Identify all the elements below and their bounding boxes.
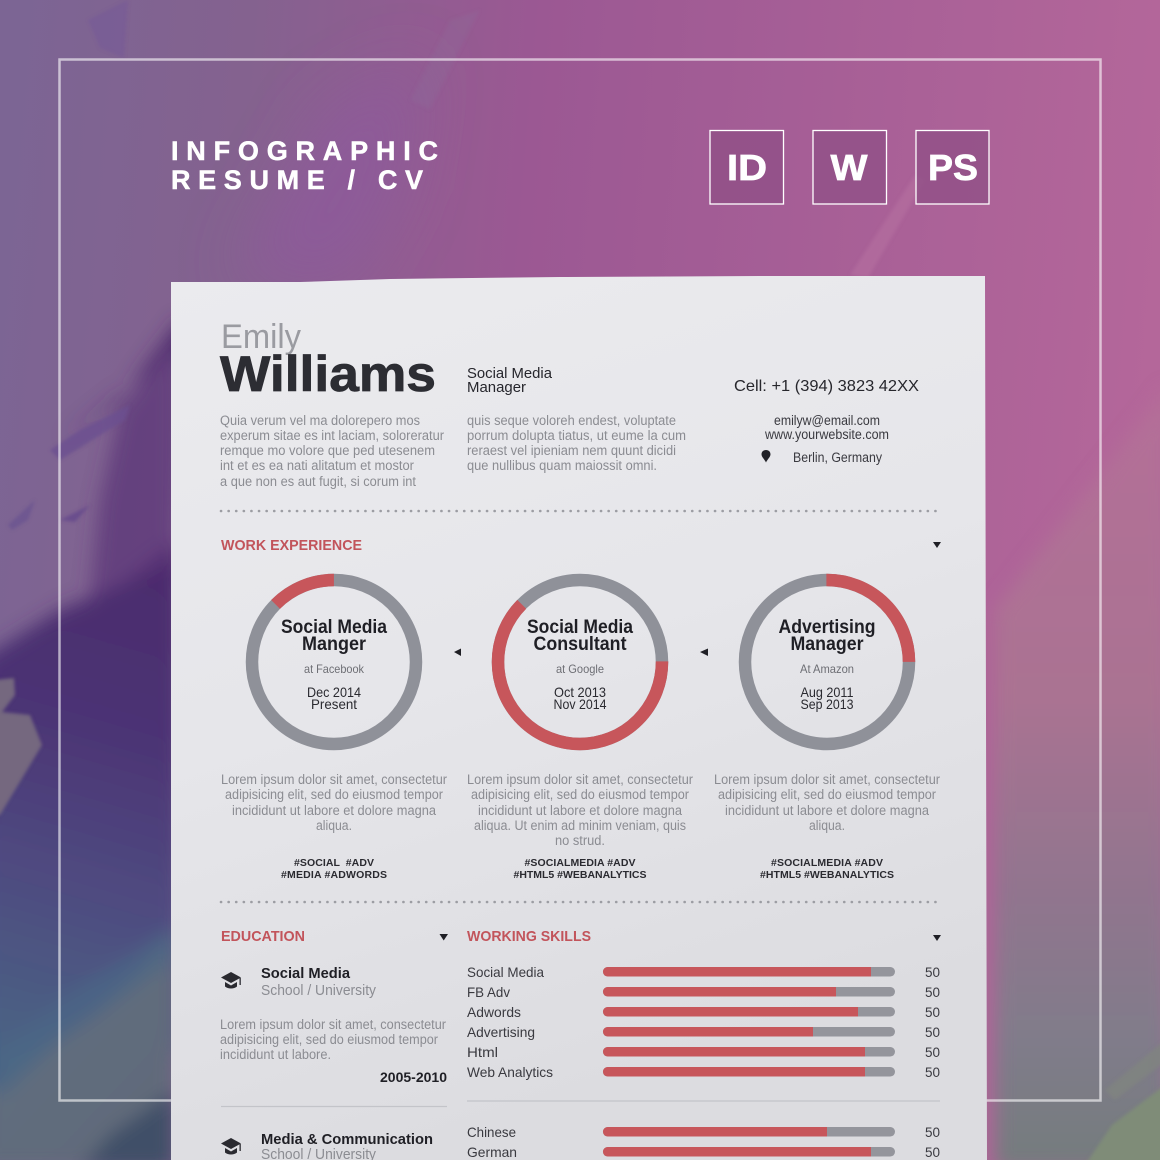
job description 1: aliqua. [316, 818, 352, 833]
resume name [220, 318, 436, 402]
icon: left arrow [454, 648, 461, 656]
skill bars: 50 [925, 1025, 940, 1040]
job description 3: adipisicing elit, sed do eiusmod tempor [718, 787, 936, 802]
hashtags 3: #SOCIALMEDIA #ADV [771, 857, 883, 869]
hashtags 2: #SOCIALMEDIA #ADV [524, 857, 636, 869]
icon: down arrow [933, 935, 941, 941]
format badge: ID [710, 130, 784, 204]
intro text left [220, 413, 444, 489]
job ring: Social Media Manger [218, 546, 450, 778]
job ring: Social Media Consultant: Nov 2014 [554, 696, 607, 712]
hashtags 2 [514, 857, 646, 881]
skill bars: Advertising [467, 1024, 535, 1040]
job ring: Social Media Manger: Present [311, 696, 357, 712]
phone number: Cell: +1 (394) 3823 42XX [734, 378, 919, 395]
skill bars: 50 [925, 985, 940, 1000]
job description 1 [221, 772, 447, 833]
intro text left: remque mo volore que ped utesenem [220, 443, 435, 458]
skill bars: 50 [925, 1065, 940, 1080]
education entry 2: Media & Communication [261, 1131, 433, 1148]
job title: Social Media [467, 365, 553, 382]
education entry 1: Social Media [261, 965, 351, 982]
intro text right: reraest vel ipieniam nem quunt dicidi [467, 443, 676, 458]
format badge: W: W [830, 147, 868, 188]
job ring: Advertising Manager [745, 580, 909, 744]
contact details: emilyw@email.com [774, 413, 880, 428]
education entry 1 [220, 965, 447, 1085]
contact details: Berlin, Germany [793, 450, 882, 465]
skill bars: 50 [925, 1005, 940, 1020]
job title [467, 365, 553, 396]
hashtags 3: #HTML5 #WEBANALYTICS [760, 869, 894, 881]
job description 3: Lorem ipsum dolor sit amet, consectetur [714, 772, 940, 787]
job ring: Social Media Manger: Manger [302, 634, 367, 655]
title: RESUME / CV [171, 165, 423, 195]
heading: work experience: WORK EXPERIENCE [221, 537, 362, 554]
intro text right: que nullibus quam maiossit omni. [467, 458, 657, 473]
job ring: Advertising Manager: Aug 2011 [800, 684, 854, 700]
intro text left: a que non es aut fugit, si corum int [220, 474, 416, 489]
skill bars [467, 964, 940, 1080]
job description 2: no strud. [555, 833, 605, 848]
icon: graduation cap [221, 972, 241, 989]
language bars: 50 [925, 1125, 940, 1140]
intro text right [467, 413, 686, 473]
job description 2: Lorem ipsum dolor sit amet, consectetur [467, 772, 693, 787]
language bars: German [467, 1144, 517, 1160]
hashtags 1: #SOCIAL #ADV [294, 857, 374, 869]
job description 3: incididunt ut labore et dolore magna [725, 803, 929, 818]
contact details [764, 413, 889, 465]
job ring: Advertising Manager: Manager [790, 634, 864, 655]
job ring: Social Media Consultant [498, 580, 662, 744]
education entry 1: incididunt ut labore. [220, 1047, 331, 1062]
education entry 2 [261, 1131, 433, 1160]
job description 2: aliqua. Ut enim ad minim veniam, quis [474, 818, 686, 833]
job ring: Social Media Manger: Dec 2014 [307, 684, 361, 700]
icon: location pin [762, 450, 770, 462]
job description 2: incididunt ut labore et dolore magna [478, 803, 682, 818]
job ring: Social Media Manger: Social Media [281, 617, 387, 638]
intro text left: int et es ea nati alitatum et mostor [220, 458, 414, 473]
job description 2: adipisicing elit, sed do eiusmod tempor [471, 787, 689, 802]
resume paper [171, 276, 987, 1160]
hashtags 1: #MEDIA #ADWORDS [281, 869, 387, 881]
skill bars: 50 [925, 1045, 940, 1060]
intro text left: Quia verum vel ma dolorepero mos [220, 413, 420, 428]
intro text right: porrum dolupta tiatus, ut eume la cum [467, 428, 686, 443]
job ring: Advertising Manager: Sep 2013 [800, 696, 854, 712]
heading: education: EDUCATION [221, 928, 305, 945]
resume name: Emily [221, 318, 301, 356]
title: INFOGRAPHIC [171, 136, 438, 166]
skill bars: Html [467, 1044, 498, 1060]
job description 1: Lorem ipsum dolor sit amet, consectetur [221, 772, 447, 787]
skill bars: FB Adv [467, 984, 510, 1000]
education entry 1: 2005-2010 [380, 1070, 447, 1085]
job description 1: incididunt ut labore et dolore magna [232, 803, 436, 818]
education entry 1: Lorem ipsum dolor sit amet, consectetur [220, 1017, 446, 1032]
icon: left arrow [700, 648, 708, 656]
skill bars: 50 [925, 965, 940, 980]
language bars: Chinese [467, 1124, 516, 1140]
hashtags 2: #HTML5 #WEBANALYTICS [514, 869, 646, 881]
icon: down arrow [933, 542, 941, 548]
intro text left: experum sitae es int laciam, soloreratur [220, 428, 444, 443]
job description 3: aliqua. [809, 818, 845, 833]
title [171, 136, 438, 195]
contact details: www.yourwebsite.com [764, 427, 889, 442]
skill bars: Adwords [467, 1004, 521, 1020]
resume name: Williams [220, 346, 436, 402]
education entry 1: School / University [261, 982, 376, 999]
job title: Manager [467, 379, 526, 396]
job ring: Social Media Consultant: Social Media [527, 617, 633, 638]
language bars [467, 1124, 940, 1160]
icon: graduation cap [221, 1138, 241, 1155]
job description 1: adipisicing elit, sed do eiusmod tempor [225, 787, 443, 802]
language bars: 50 [925, 1145, 940, 1160]
job ring: Advertising Manager: At Amazon [800, 662, 854, 676]
job ring: Social Media Consultant: Consultant [534, 634, 627, 655]
format badge: PS [916, 130, 989, 204]
heading: working skills: WORKING SKILLS [467, 928, 591, 945]
education entry 1: adipisicing elit, sed do eiusmod tempor [220, 1032, 438, 1047]
job description 3 [714, 772, 940, 833]
skill bars: Social Media [467, 964, 544, 980]
format badge: PS: PS [928, 147, 978, 188]
intro text right: quis seque voloreh endest, voluptate [467, 413, 676, 428]
format badge: ID: ID [727, 147, 767, 188]
icon: down arrow [440, 934, 448, 940]
hashtags 3 [760, 857, 894, 881]
job ring: Social Media Consultant: Oct 2013 [554, 684, 606, 700]
job ring: Social Media Consultant: at Google [556, 662, 604, 676]
job ring: Social Media Manger: at Facebook [304, 662, 365, 676]
hashtags 1 [281, 857, 387, 881]
skill bars: Web Analytics [467, 1064, 553, 1080]
job description 2 [467, 772, 693, 848]
job ring: Advertising Manager: Advertising [778, 617, 876, 638]
format badge: W [813, 130, 886, 204]
